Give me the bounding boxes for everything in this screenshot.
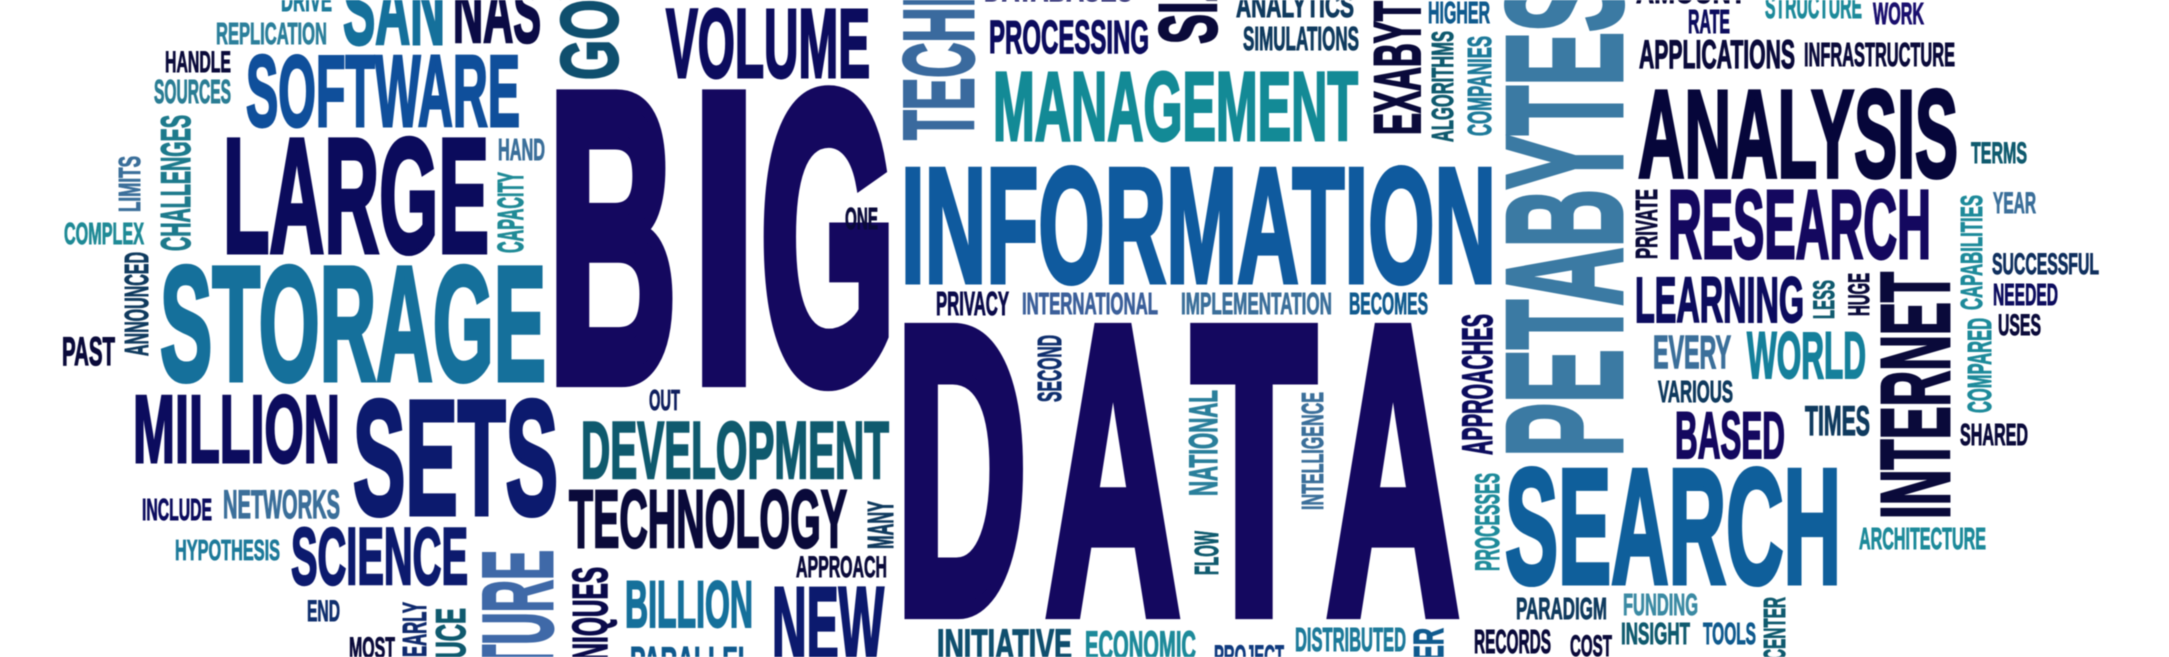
word: SIMULATIONS: SIMULATIONS <box>1243 20 1359 57</box>
word cloud: INFRASTRUCTURE <box>1804 36 1955 73</box>
word: VARIOUS: VARIOUS <box>1658 374 1733 409</box>
word: NETWORKS: NETWORKS <box>223 483 340 527</box>
word: HANDLE: HANDLE <box>165 46 231 79</box>
word: HYPOTHESIS: HYPOTHESIS <box>175 535 280 567</box>
word cloud: SECOND <box>1031 335 1068 402</box>
word: INCLUDE: INCLUDE <box>142 492 212 527</box>
word cloud: LARGE <box>223 104 489 287</box>
word: HAND: HAND <box>498 132 545 167</box>
word cloud: HUGE <box>1843 273 1876 316</box>
word cloud: ANNOUNCED <box>118 252 155 356</box>
word cloud: SOFTWARE <box>246 36 520 148</box>
word cloud: LESS <box>1808 280 1841 319</box>
word cloud: WORLD <box>1747 318 1866 392</box>
word cloud: SETS <box>353 366 558 549</box>
word: TERMS: TERMS <box>1971 137 2027 170</box>
word cloud: SOURCES <box>154 73 231 110</box>
word: MANAGEMENT: MANAGEMENT <box>993 52 1358 161</box>
word: REPLICATION: REPLICATION <box>216 16 327 51</box>
word: PROCESSING: PROCESSING <box>989 11 1149 63</box>
word cloud: APPROACHES <box>1454 314 1502 455</box>
word: PRIVACY: PRIVACY <box>936 285 1009 322</box>
word cloud: BASED <box>1675 398 1785 472</box>
word: NATIONAL: NATIONAL <box>1182 390 1226 496</box>
word: APPROACH: APPROACH <box>796 551 887 584</box>
word: INTELLIGENCE: INTELLIGENCE <box>1295 392 1330 510</box>
word cloud: COMPARED <box>1961 318 1998 413</box>
word: INTERNET: INTERNET <box>1861 272 1970 519</box>
word cloud: G <box>760 9 896 466</box>
word: NEEDED: NEEDED <box>1993 277 2058 312</box>
word cloud: FLOW <box>1188 531 1225 575</box>
word cloud: STORAGE <box>160 232 546 415</box>
word: END: END <box>307 595 340 628</box>
word: INTERNATIONAL: INTERNATIONAL <box>1022 286 1158 321</box>
word cloud: SCIENCE <box>291 512 468 602</box>
word cloud: CENTER <box>1757 597 1792 657</box>
word: EARLY: EARLY <box>396 602 433 657</box>
word: DISTRIBUTED: DISTRIBUTED <box>1295 621 1406 657</box>
word: IMPLEMENTATION: IMPLEMENTATION <box>1181 286 1332 321</box>
word: COMPLEX: COMPLEX <box>64 216 144 251</box>
word cloud: CAPACITY <box>490 172 531 253</box>
word: DATA <box>896 244 1459 657</box>
word cloud: RATE <box>1688 3 1730 40</box>
word cloud: ONE <box>845 201 878 236</box>
word: BECOMES: BECOMES <box>1349 286 1428 321</box>
word: PRIVATE: PRIVATE <box>1629 189 1664 259</box>
word: PARADIGM: PARADIGM <box>1516 591 1607 626</box>
word: PAST: PAST <box>62 330 115 374</box>
word: MILLION: MILLION <box>133 376 340 483</box>
word: EVERY: EVERY <box>1653 326 1731 378</box>
word: BIG: I <box>691 9 757 466</box>
word: SHARED: SHARED <box>1960 417 2028 452</box>
word: ARCHITECTURE: ARCHITECTURE <box>1859 521 1986 556</box>
word cloud: TOOLS <box>1703 616 1756 651</box>
word cloud: BILLION <box>625 567 753 641</box>
word cloud: PROCESSES <box>1469 473 1507 571</box>
word: APPLICATIONS: APPLICATIONS <box>1639 33 1795 77</box>
word: FUNDING: FUNDING <box>1623 587 1698 622</box>
word: CAPABILITIES: CAPABILITIES <box>1954 195 1989 310</box>
word: USES: USES <box>1998 309 2041 342</box>
word: INFORMATION: INFORMATION <box>901 134 1496 317</box>
word: OUT: OUT <box>649 385 680 417</box>
word cloud: MANY <box>860 501 901 549</box>
word cloud: DEVELOPMENT <box>581 406 889 496</box>
word: TIMES: TIMES <box>1805 397 1870 444</box>
word: INSIGHT: INSIGHT <box>1621 616 1690 651</box>
word: LEARNING: LEARNING <box>1635 264 1804 336</box>
word: LIMITS: LIMITS <box>112 156 147 212</box>
word cloud: TECHNOLOGY <box>569 474 847 565</box>
word: YEAR: YEAR <box>1993 187 2036 220</box>
word: BIG: B <box>548 9 677 466</box>
